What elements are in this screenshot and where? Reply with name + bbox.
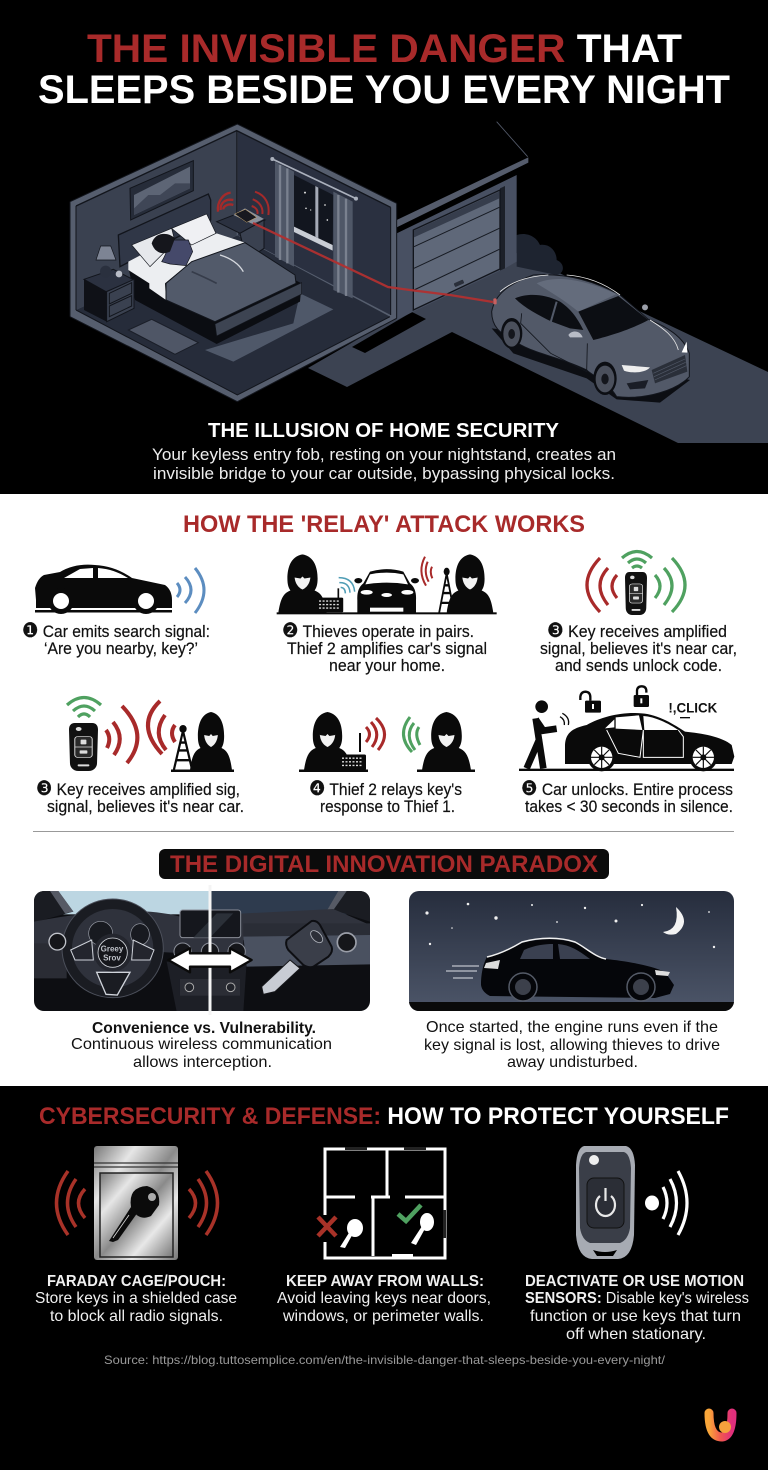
text bbox=[540, 620, 737, 675]
step 3 repeat bbox=[36, 698, 244, 816]
text: SENSORS: Disable key's wireless bbox=[525, 1290, 749, 1307]
hero caption heading: THE ILLUSION OF HOME SECURITY bbox=[208, 420, 560, 442]
caption: engine keeps running: Once started, the engine runs even if the bbox=[426, 1019, 718, 1036]
text: FARADAY CAGE/POUCH: bbox=[47, 1273, 226, 1290]
text: ‘Are you nearby, key?’ bbox=[44, 639, 198, 658]
garage bbox=[397, 122, 563, 320]
step 3 bbox=[540, 552, 737, 675]
defense 3: key fob power off bbox=[525, 1146, 749, 1343]
right nightstand with key fob bbox=[217, 192, 269, 260]
text: Store keys in a shielded case bbox=[35, 1290, 237, 1307]
heading: cybersecurity and defense: CYBERSECURITY & DEFENSE: HOW TO PROTECT YOURSELF bbox=[39, 1103, 729, 1130]
stars bbox=[425, 903, 715, 948]
text bbox=[277, 1273, 491, 1325]
night car bbox=[481, 939, 674, 998]
text bbox=[521, 778, 733, 816]
step 2 bbox=[277, 554, 497, 675]
text bbox=[36, 778, 244, 816]
curtains bbox=[275, 162, 294, 267]
text: ❶ Car emits search signal: bbox=[22, 620, 210, 642]
text: ❹ Thief 2 relays key's bbox=[309, 778, 462, 800]
caption: convenience vs vulnerability: Continuous wireless communication bbox=[71, 1036, 332, 1053]
moon bbox=[663, 907, 684, 935]
car shadow bbox=[492, 328, 690, 403]
text: Avoid leaving keys near doors, bbox=[277, 1290, 491, 1307]
icon: thieves with car bbox=[277, 554, 497, 614]
text: function or use keys that turn bbox=[530, 1308, 741, 1325]
banner heading: digital innovation paradox: THE DIGITAL INNOVATION PARADOX bbox=[170, 851, 598, 878]
centre screen bbox=[180, 910, 241, 938]
text: ❺ Car unlocks. Entire process bbox=[521, 778, 733, 800]
icon: key bbox=[262, 921, 332, 994]
caption: convenience vs vulnerability: Convenience vs. Vulnerability. bbox=[92, 1020, 316, 1037]
icon: thief 2 relaying bbox=[299, 712, 475, 772]
text: to block all radio signals. bbox=[50, 1308, 223, 1325]
centre divider bbox=[208, 885, 212, 1015]
wall picture bbox=[130, 161, 193, 220]
steering wheel bbox=[62, 899, 163, 998]
text: ❷ Thieves operate in pairs. bbox=[282, 620, 474, 642]
text bbox=[35, 1273, 237, 1325]
text: ❸ Key receives amplified sig, bbox=[36, 778, 240, 800]
text bbox=[309, 778, 462, 816]
icon: key fob with power button bbox=[576, 1146, 687, 1259]
defense 1: faraday pouch bbox=[35, 1146, 237, 1325]
text bbox=[282, 620, 487, 675]
text: and sends unlock code. bbox=[555, 656, 722, 675]
hero caption text: Your keyless entry fob, resting on your nightstand, creates an bbox=[152, 445, 616, 464]
left nightstand with lamp bbox=[84, 246, 134, 322]
panel: car dashboard and key: Srov bbox=[103, 953, 121, 962]
text: ❸ Key receives amplified bbox=[547, 620, 727, 642]
icon: car unlocked: !,CLICK bbox=[668, 699, 717, 715]
hero caption text bbox=[152, 445, 616, 483]
text: KEEP AWAY FROM WALLS: bbox=[286, 1273, 484, 1290]
window with stars bbox=[294, 175, 333, 248]
defense 2: floor plan bbox=[277, 1147, 491, 1325]
source line: Source: https://blog.tuttosemplice.com/en/the-invisible-danger-that-sleeps-beside-you-every-night/ bbox=[104, 1353, 666, 1367]
step 4 bbox=[299, 712, 475, 816]
caption: engine keeps running: away undisturbed. bbox=[507, 1054, 638, 1071]
icon: pouch with key bbox=[56, 1146, 218, 1260]
icon: car emitting signal bbox=[35, 565, 204, 614]
panel: car driving at night bbox=[409, 891, 734, 1011]
panel: car dashboard and key: Greey bbox=[101, 945, 124, 954]
panel: car dashboard and key bbox=[30, 885, 375, 1015]
relay signal beam bbox=[253, 223, 493, 302]
bedroom bbox=[70, 124, 397, 402]
icon: double arrow bbox=[168, 948, 252, 972]
room shell bbox=[70, 124, 397, 402]
caption: engine keeps running bbox=[424, 1019, 720, 1071]
text bbox=[525, 1273, 749, 1343]
parked car bbox=[492, 275, 689, 397]
title: SLEEPS BESIDE YOU EVERY NIGHT bbox=[38, 68, 730, 112]
icon: key and thief relay bbox=[67, 698, 234, 772]
caption: engine keeps running: key signal is lost, allowing thieves to drive bbox=[424, 1037, 720, 1054]
caption: convenience vs vulnerability bbox=[71, 1020, 332, 1071]
caption: convenience vs vulnerability: allows interception. bbox=[133, 1054, 272, 1071]
text: signal, believes it's near car. bbox=[47, 797, 244, 816]
text: takes < 30 seconds in silence. bbox=[525, 797, 733, 816]
panel: relay attack and digital paradox (white) bbox=[0, 494, 768, 1086]
text: near your home. bbox=[329, 656, 445, 675]
text: signal, believes it's near car, bbox=[540, 639, 737, 658]
background: dark hero bbox=[0, 0, 768, 494]
garage and parked car bbox=[397, 122, 690, 403]
text: Thief 2 amplifies car's signal bbox=[287, 639, 487, 658]
hero caption text: invisible bridge to your car outside, bypassing physical locks. bbox=[153, 464, 615, 483]
icon: floor plan with keys bbox=[318, 1147, 446, 1259]
step 1 bbox=[22, 565, 210, 658]
sleeping person bbox=[162, 240, 193, 266]
text: windows, or perimeter walls. bbox=[282, 1308, 484, 1325]
text: response to Thief 1. bbox=[320, 797, 455, 816]
icon: key receiving amplified signal bbox=[587, 552, 685, 615]
bed bbox=[118, 194, 302, 344]
step 5 bbox=[519, 686, 734, 816]
heading: relay attack: HOW THE 'RELAY' ATTACK WORKS bbox=[183, 511, 585, 538]
rug bbox=[205, 293, 333, 362]
text: DEACTIVATE OR USE MOTION bbox=[525, 1273, 744, 1290]
text bbox=[22, 620, 210, 658]
text: off when stationary. bbox=[566, 1326, 706, 1343]
title bbox=[38, 27, 730, 112]
hero illustration: bedroom, garage, car and relay signal bbox=[70, 122, 768, 443]
vents bbox=[174, 942, 192, 956]
icon: brand logo bbox=[709, 1413, 732, 1437]
icon: car unlocked bbox=[519, 686, 734, 771]
driveway bbox=[308, 253, 768, 443]
speed lines bbox=[446, 966, 479, 978]
title: THE INVISIBLE DANGER THAT bbox=[87, 27, 682, 71]
